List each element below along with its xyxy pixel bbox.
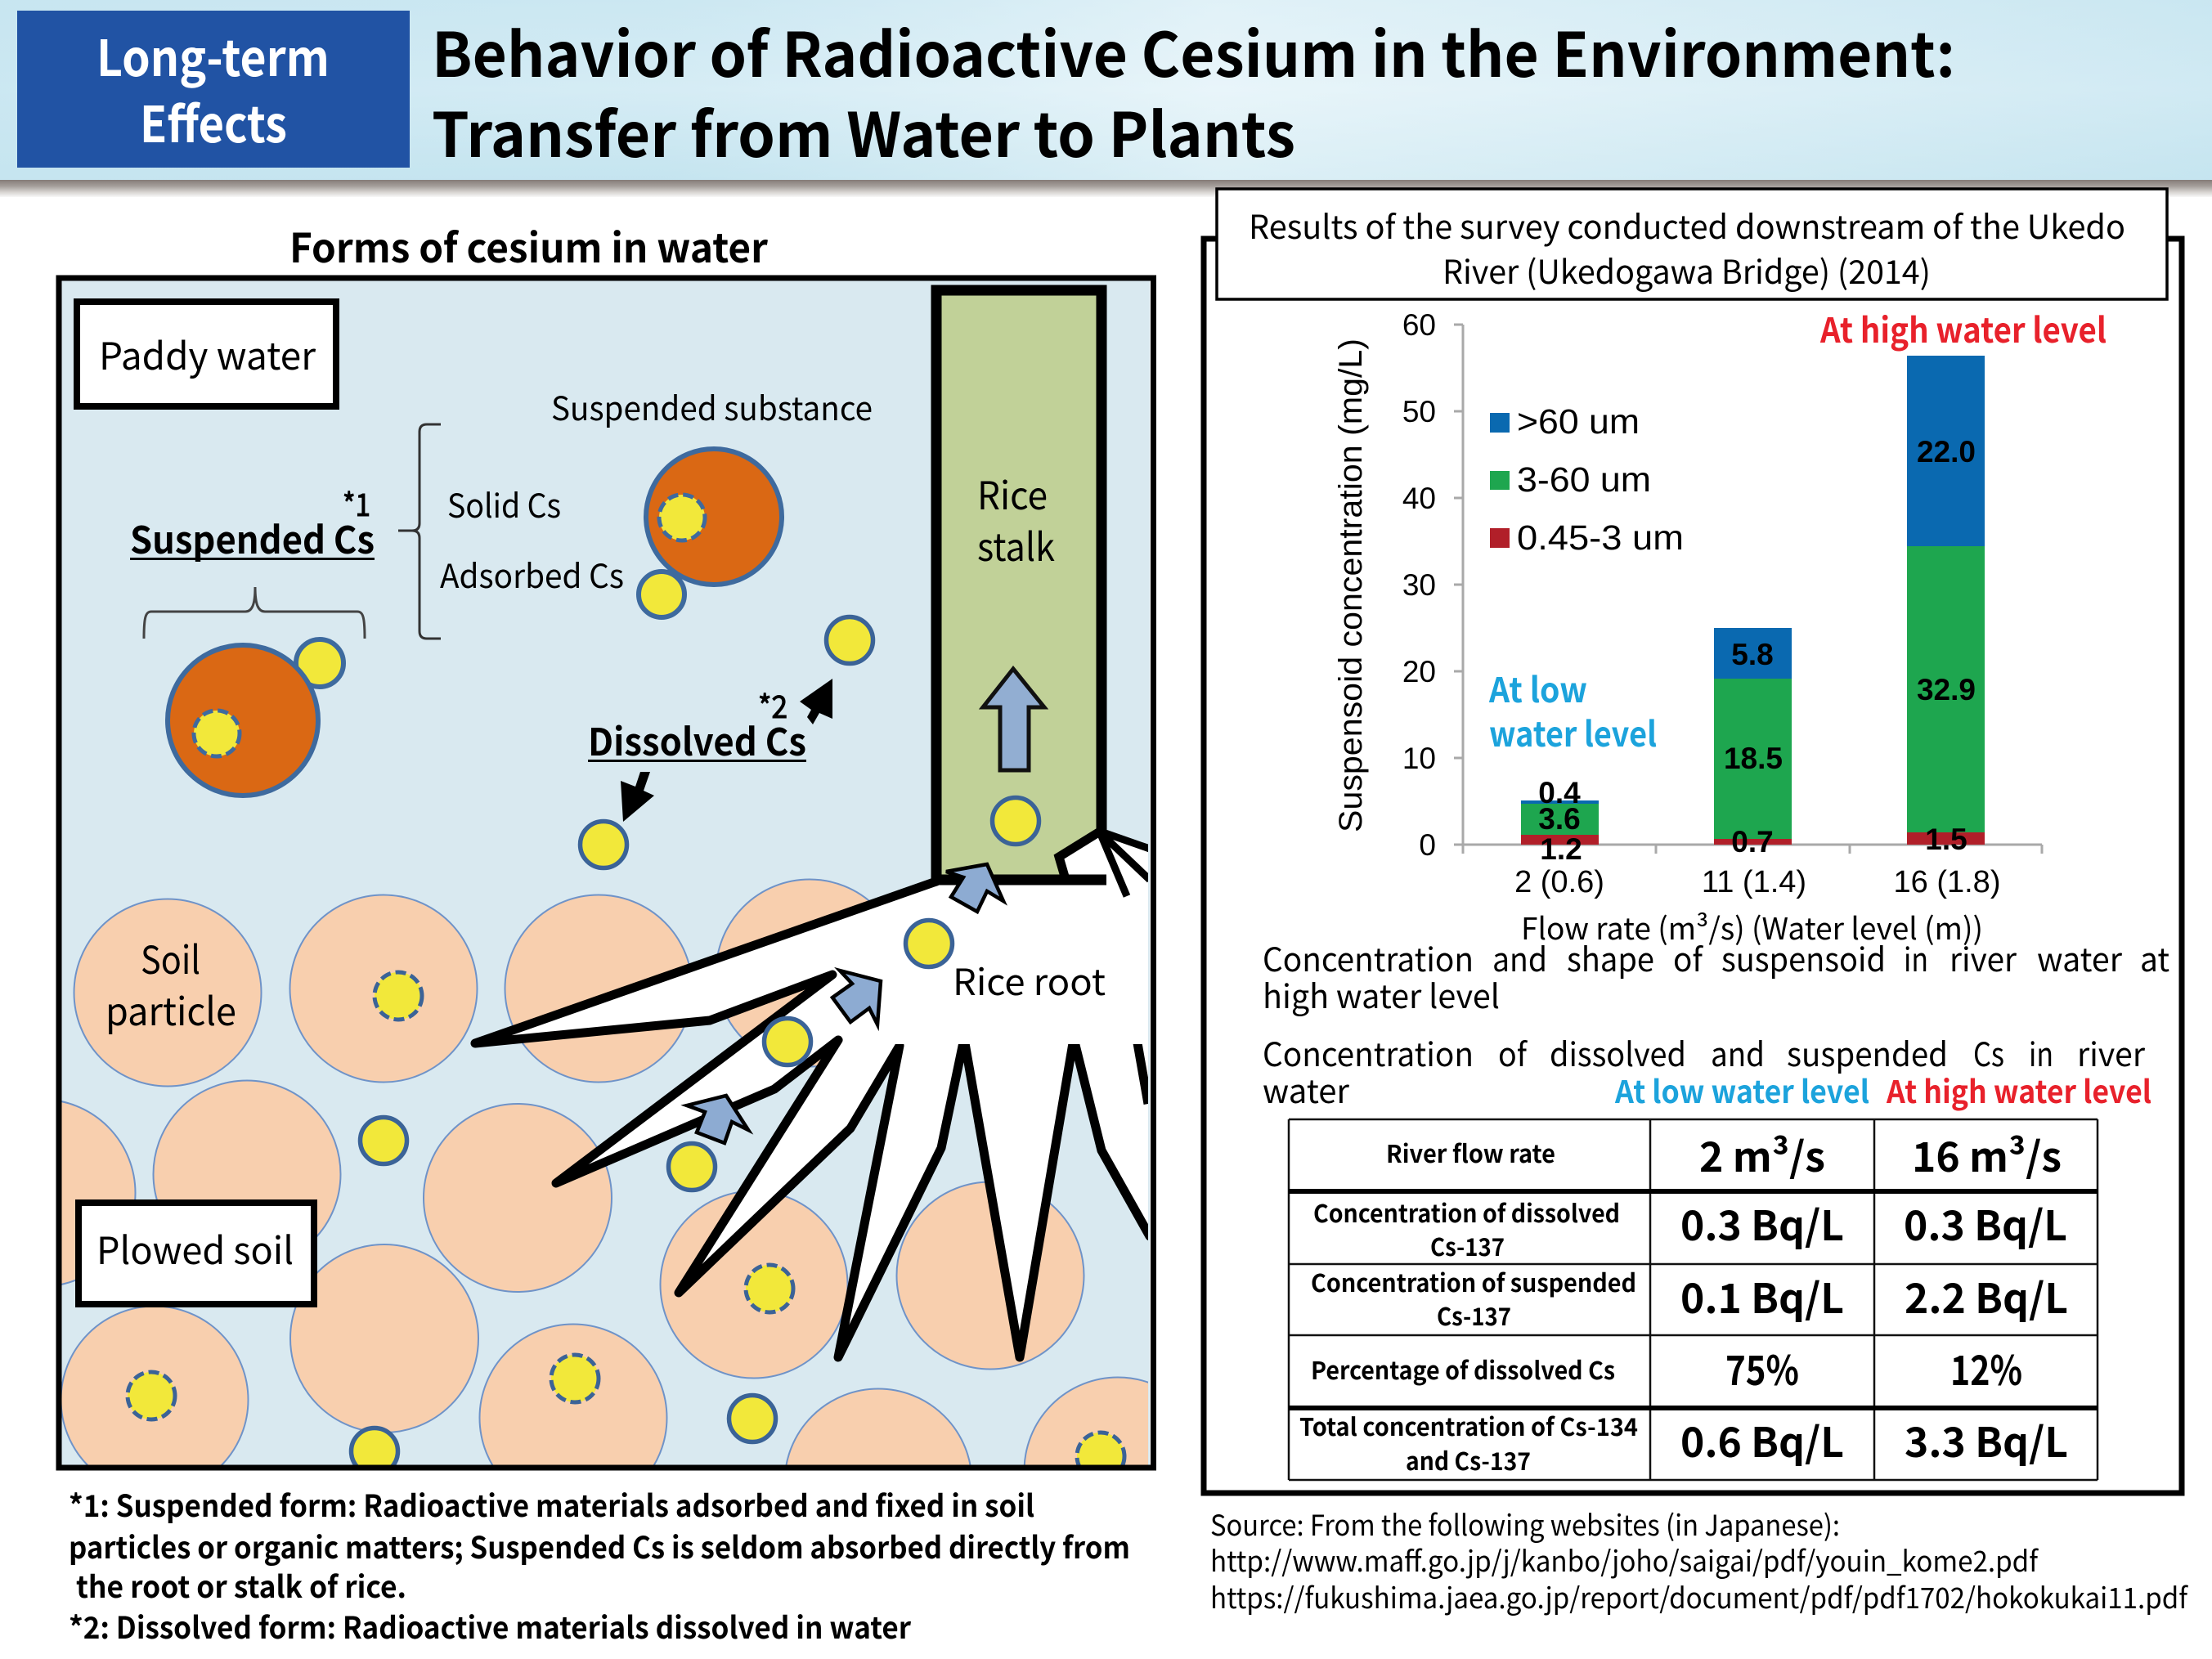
caption: suspensoid: Concentration [1263,934,1474,981]
label: suspended Cs: *1 [343,480,370,525]
label: adsorbed Cs: Adsorbed Cs [440,550,624,598]
header banner [0,0,2212,197]
caption: cesium concentration: in [2029,1029,2053,1076]
table row: percentage [1311,1338,2022,1397]
caption: cesium concentration: dissolved [1550,1029,1686,1076]
table row: suspended: Concentration of suspended [1311,1263,1636,1299]
y axis tick labels [1402,308,1436,862]
legend: 0.45-3 um [1517,518,1684,558]
title: Behavior of Radioactive Cesium in the Environment: [432,6,1955,95]
caption: suspensoid: in [1904,934,1928,981]
table row: percentage: 75% [1725,1338,1799,1397]
annotation: low water level: water level [1489,707,1657,757]
suspended particle: lower [168,639,343,796]
legend: 3-60 um [1517,460,1651,500]
caption: suspensoid: and [1492,934,1547,981]
category badge: Long-term [96,18,330,91]
footnotes: *2: Dissolved form: Radioactive materials dissolved in water [69,1603,912,1648]
footnotes [69,1482,1130,1648]
rice root [475,831,1150,1357]
label box: paddy water: Paddy water [99,327,316,381]
y axis title: Suspensoid concentration (mg/L) [1333,339,1369,832]
data labels: 22.0 [1917,435,1976,469]
x axis labels [1514,865,2000,899]
annotation: low water level: At low [1488,663,1587,713]
caption: suspensoid: river [1950,934,2017,981]
stacked bar chart [1333,303,2107,948]
label: soil particle: particle [105,980,236,1037]
table row: total: and Cs-137 [1406,1442,1531,1477]
table row: flow rate: River flow rate [1386,1134,1555,1170]
data labels: 1.2 [1540,832,1582,866]
caption: suspensoid: water [2037,934,2122,981]
data labels: 0.7 [1731,825,1774,859]
table [1289,1119,2098,1480]
table row: suspended: 0.1 Bq/L [1680,1267,1844,1325]
caption: cesium concentration: Cs [1973,1029,2004,1076]
source: http://www.maff.go.jp/j/kanbo/joho/saigai/pdf/youin_kome2.pdf [1210,1539,2039,1581]
table row: dissolved [1313,1194,2067,1263]
caption: suspensoid: of [1673,934,1704,981]
y axis tick labels: 60 [1402,308,1436,342]
caption: cesium concentration: of [1498,1029,1528,1076]
rice stalk: stalk [977,516,1055,572]
soil-bound cesium circles [128,972,1124,1480]
x axis labels: 11 (1.4) [1702,865,1806,899]
table row: suspended [1311,1263,2068,1333]
data labels [1538,435,1976,866]
label: dissolved Cs: Dissolved Cs [588,713,806,767]
x axis title: Flow rate (m³/s) (Water level (m)) [1521,904,1983,948]
data labels: 5.8 [1731,638,1774,671]
source [1210,1503,2189,1617]
table header: low water level: At low water level [1614,1067,1869,1112]
label: suspended Cs [130,480,375,565]
caption: cesium concentration [1263,1029,2145,1113]
x axis labels: 2 (0.6) [1514,865,1604,899]
heading: forms of cesium in water: Forms of cesium in water [289,217,769,275]
caption: cesium concentration: water [1263,1065,1349,1113]
table row: dissolved: 0.3 Bq/L [1680,1194,1844,1253]
caption: cesium concentration: river [2077,1029,2145,1076]
caption: cesium concentration: suspended [1787,1029,1948,1076]
table row: suspended: 2.2 Bq/L [1905,1267,2068,1325]
label box: plowed soil: Plowed soil [96,1222,294,1276]
label box: paddy water [77,302,336,406]
caption: suspensoid: at [2140,934,2169,981]
footnotes: the root or stalk of rice. [76,1563,406,1607]
y axis tick labels: 20 [1402,655,1436,688]
table row: flow rate: 16 m³/s [1912,1125,2062,1184]
caption: suspensoid: high water level [1263,971,1500,1018]
dissolved cesium circles [352,617,1039,1475]
panel heading: Results of the survey conducted downstream of the Ukedo [1249,201,2125,249]
legend: >60 um [1517,402,1640,442]
panel heading [1217,189,2167,299]
data labels: 18.5 [1724,742,1783,775]
arrow: dissolved up-right [800,679,832,724]
data labels: 0.4 [1538,776,1581,809]
table row: total: Total concentration of Cs-134 [1299,1407,1638,1443]
table row: percentage: 12% [1950,1338,2022,1397]
y axis tick labels: 0 [1419,828,1436,862]
label: dissolved Cs: *2 [758,682,787,727]
table row: flow rate: 2 m³/s [1699,1125,1825,1184]
rice stalk [936,290,1102,885]
caption: suspensoid [1263,934,2169,1018]
table row: total: 0.6 Bq/L [1680,1410,1844,1469]
data labels: 32.9 [1917,673,1976,706]
label: solid Cs: Solid Cs [447,480,561,527]
brace: solid and adsorbed [398,424,441,639]
annotation: low water level [1488,663,1657,757]
y axis tick labels: 40 [1402,482,1436,515]
source: Source: From the following websites (in Japanese): [1210,1503,1840,1545]
footnotes: *1: Suspended form: Radioactive materials adsorbed and fixed in soil [69,1482,1034,1526]
caption: suspensoid: shape [1567,934,1654,981]
panel heading: River (Ukedogawa Bridge) (2014) [1443,246,1931,294]
label: dissolved Cs [588,682,806,767]
label: suspended substance: Suspended substance [551,383,873,430]
arrow: dissolved down-left [621,772,654,822]
table row: suspended: Cs-137 [1437,1297,1511,1333]
y axis tick labels: 30 [1402,568,1436,602]
table row: total [1299,1407,2068,1477]
arrows: uptake in root [687,864,1003,1143]
panel: survey results [1204,189,2182,1493]
category badge: Effects [140,84,287,157]
arrow: upward in stalk [983,669,1044,770]
caption: cesium concentration: Concentration [1263,1029,1474,1076]
legend [1490,402,1684,558]
table row: percentage: Percentage of dissolved Cs [1311,1351,1615,1387]
title: Transfer from Water to Plants [432,86,1295,175]
annotation: high water level: At high water level [1819,303,2107,353]
panel: paddy diagram [56,275,1156,1470]
data labels: 1.5 [1925,823,1967,856]
rice stalk: Rice [977,464,1048,521]
data labels: 3.6 [1538,802,1581,836]
category badge [17,11,410,168]
suspended particle: upper [639,449,782,617]
title [432,6,1955,175]
table row: dissolved: Concentration of dissolved [1313,1194,1620,1230]
table row: dissolved: 0.3 Bq/L [1904,1194,2067,1253]
table row: flow rate [1386,1125,2062,1184]
caption: cesium concentration: and [1711,1029,1765,1076]
table header: high water level: At high water level [1886,1067,2151,1112]
bars [1521,356,1985,845]
table row: dissolved: Cs-137 [1430,1227,1505,1263]
brace: suspended particle [144,587,365,639]
label: suspended Cs: Suspended Cs [130,511,375,565]
y axis tick labels: 10 [1402,742,1436,775]
y axis tick labels: 50 [1402,395,1436,428]
soil particles [62,878,1148,1465]
axes [1454,325,2042,854]
label: soil particle: Soil [141,929,200,985]
caption: suspensoid: suspensoid [1721,934,1886,981]
table row: total: 3.3 Bq/L [1905,1410,2068,1469]
rice root: Rice root [953,953,1106,1006]
label: soil particle [105,929,236,1037]
x axis labels: 16 (1.8) [1894,865,2000,899]
footnotes: particles or organic matters; Suspended Cs is seldom absorbed directly from [69,1523,1130,1567]
label box: plowed soil [79,1203,314,1304]
